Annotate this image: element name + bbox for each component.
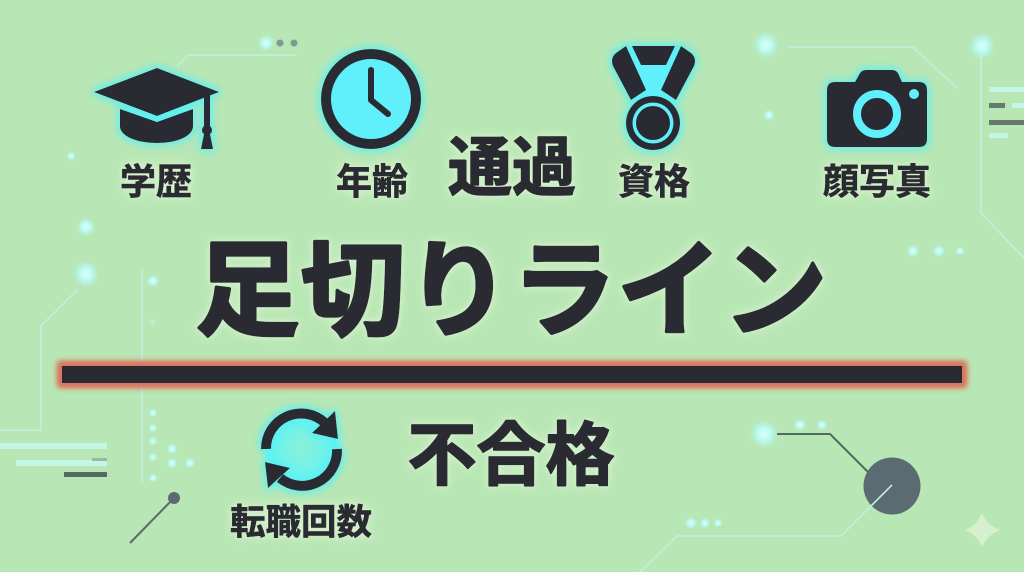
- label: 顔写真: 顔写真: [823, 161, 931, 202]
- icon: medal: [612, 46, 695, 150]
- icon: camera: [827, 70, 927, 147]
- icon: clock: [326, 54, 416, 144]
- sparkle: [965, 513, 1000, 547]
- icon: refresh glow: [260, 407, 344, 491]
- label: 資格: 資格: [618, 161, 690, 202]
- threshold line: [62, 366, 962, 383]
- circuit decoration: glowing dots: [66, 31, 996, 530]
- pin node: [130, 492, 180, 543]
- label: 不合格: 不合格: [408, 417, 614, 494]
- icon: refresh arrows: [265, 411, 338, 488]
- label: 学歴: 学歴: [120, 161, 192, 202]
- icon: graduation cap: [94, 68, 219, 149]
- label: 転職回数: 転職回数: [230, 502, 372, 542]
- gray dots top: [276, 40, 298, 46]
- label: 年齢: 年齢: [336, 161, 408, 202]
- data bars right: [989, 87, 1024, 138]
- title: 足切りライン: 足切りライン: [195, 234, 829, 350]
- label: 通過: 通過: [448, 132, 576, 204]
- data bars left: [0, 443, 107, 477]
- node connector lower right: [777, 434, 920, 514]
